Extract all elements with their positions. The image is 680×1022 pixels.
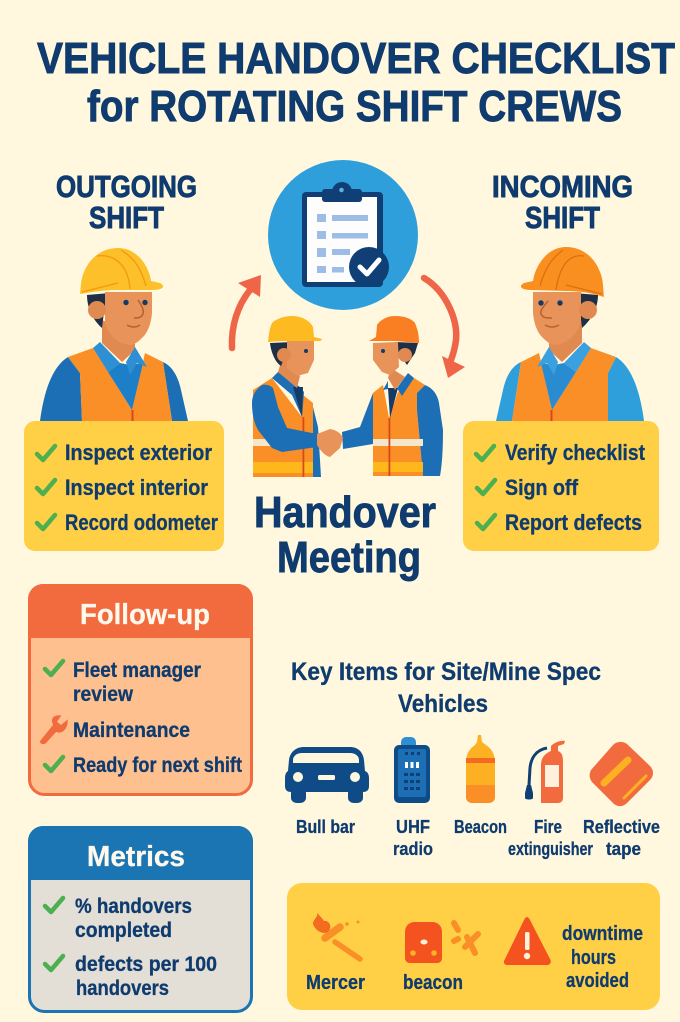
item: maintenance	[41, 716, 190, 743]
item: inspect interior: Inspect interior	[65, 475, 208, 500]
heading: handover meeting: Handover	[254, 488, 436, 537]
item: ready for next shift: Ready for next shift	[73, 754, 242, 777]
panel: metrics	[28, 826, 253, 1012]
label: UHF radio: radio	[393, 839, 433, 859]
heading: outgoing shift: SHIFT	[89, 200, 164, 235]
item: record odometer: Record odometer	[65, 510, 218, 535]
heading: handover meeting: Meeting	[277, 533, 421, 582]
heading: key items: Vehicles	[398, 690, 488, 718]
label: reflective tape	[583, 817, 660, 859]
heading: outgoing shift	[56, 169, 197, 235]
left small worker	[252, 316, 443, 477]
item: handovers completed: % handovers	[75, 895, 192, 918]
arrow: up to clipboard	[232, 275, 261, 348]
heading: handover meeting	[254, 488, 436, 582]
label: fire extinguisher	[508, 817, 593, 859]
item: defects per 100 handovers	[45, 953, 217, 1000]
item: report defects: Report defects	[505, 510, 642, 535]
label: downtime hours avoided: hours	[571, 947, 616, 969]
label: reflective tape: tape	[606, 839, 641, 859]
label: mercer: Mercer	[306, 972, 365, 994]
icon: fire extinguisher	[525, 741, 565, 803]
item: sign off	[477, 475, 579, 500]
item: maintenance: Maintenance	[73, 719, 190, 742]
icon: warning triangle	[504, 917, 551, 965]
label: downtime hours avoided: avoided	[566, 970, 629, 992]
icon: beacon light	[405, 922, 478, 963]
panel: incoming checklist	[463, 421, 659, 551]
heading: incoming shift	[492, 169, 633, 235]
icon: UHF radio	[394, 737, 430, 803]
icon: bull bar car	[285, 747, 369, 803]
label: bull bar: Bull bar	[296, 817, 355, 837]
item: handovers completed: completed	[75, 919, 172, 942]
item: fleet manager review	[45, 659, 201, 706]
item: sign off: Sign off	[505, 475, 579, 500]
item: fleet manager review: Fleet manager	[73, 659, 201, 682]
item: defects per 100 handovers: defects per 100	[75, 953, 217, 976]
label: beacon: beacon	[403, 972, 463, 994]
item: defects per 100 handovers: handovers	[76, 977, 169, 1000]
item: fleet manager review: review	[73, 683, 134, 706]
icon: handshake workers	[28, 316, 660, 1012]
label: reflective tape: Reflective	[583, 817, 660, 837]
heading: outgoing shift: OUTGOING	[56, 169, 197, 204]
title: for ROTATING SHIFT CREWS	[87, 82, 622, 131]
heading: key items	[291, 658, 601, 718]
icon: beacon bottle	[466, 735, 495, 803]
label: UHF radio	[393, 817, 433, 859]
label: UHF radio: UHF	[396, 817, 430, 837]
icon: outgoing worker	[40, 248, 188, 421]
panel: follow-up	[28, 584, 253, 794]
icon: incoming worker	[496, 247, 644, 421]
clasped hands	[317, 429, 343, 457]
label: downtime hours avoided: downtime	[562, 923, 643, 945]
label: downtime hours avoided	[562, 923, 643, 992]
panel: bottom outcomes	[287, 883, 660, 1010]
arrow: down from clipboard	[424, 278, 465, 378]
heading: metrics: Metrics	[87, 841, 185, 873]
heading: incoming shift: SHIFT	[525, 200, 600, 235]
title	[37, 34, 675, 131]
label: fire extinguisher: extinguisher	[508, 839, 593, 859]
item: inspect exterior: Inspect exterior	[65, 440, 212, 465]
panel: outgoing checklist	[24, 421, 224, 551]
heading: key items: Key Items for Site/Mine Spec	[291, 658, 601, 686]
heading: follow-up: Follow-up	[80, 599, 210, 631]
label: fire extinguisher: Fire	[534, 817, 562, 837]
right small worker	[373, 378, 425, 476]
label: beacon: Beacon	[454, 817, 507, 837]
icon: torch	[313, 913, 360, 959]
heading: incoming shift: INCOMING	[492, 169, 633, 204]
item: verify checklist: Verify checklist	[505, 440, 646, 465]
item: handovers completed	[45, 895, 192, 942]
icon: clipboard in circle	[268, 160, 418, 310]
icon: reflective tape	[590, 742, 653, 806]
